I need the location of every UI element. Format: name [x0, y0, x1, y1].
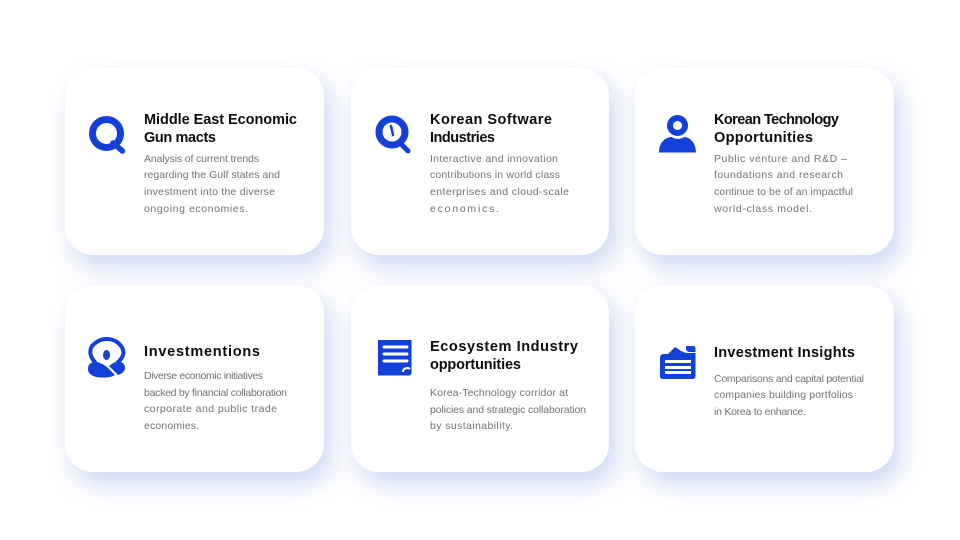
- text block: Comparisons and capital potential: [714, 373, 864, 385]
- heading: [430, 112, 552, 146]
- text block: foundations and research: [714, 169, 843, 181]
- heading: Industries: [430, 130, 495, 146]
- text block: in Korea to enhance.: [714, 406, 806, 418]
- text block: backed by financial collaboration: [144, 387, 287, 399]
- heading: [144, 112, 297, 146]
- text block: world-class model.: [713, 203, 812, 215]
- heading: Korean Software: [430, 112, 552, 128]
- panel: Investment Insights: [635, 285, 894, 472]
- text block: policies and strategic collaboration: [430, 404, 586, 416]
- text block: [430, 153, 569, 215]
- text block: contributions in world class: [430, 169, 560, 181]
- text block: enterprises and cloud-scale: [430, 186, 569, 198]
- text block: [714, 373, 864, 418]
- text block: continue to be of an impactful: [714, 186, 853, 198]
- text block: corporate and public trade: [144, 403, 277, 415]
- text block: Public venture and R&D –: [714, 153, 847, 165]
- text block: Interactive and innovation: [430, 153, 558, 165]
- text block: [713, 153, 853, 215]
- panel: Middle East Economic Contacts: [65, 68, 324, 255]
- text block: [430, 387, 586, 432]
- heading: [430, 339, 578, 373]
- heading: Opportunities: [714, 130, 813, 146]
- text block: [144, 370, 287, 432]
- heading: Investmentions: [144, 344, 260, 360]
- heading: opportunities: [430, 357, 521, 373]
- heading: [714, 112, 839, 146]
- text block: investment into the diverse: [144, 186, 275, 198]
- text block: economies.: [144, 420, 199, 432]
- heading: Middle East Economic: [144, 112, 297, 128]
- text block: ongoing economies.: [144, 203, 248, 215]
- heading: Investment Insights: [714, 345, 855, 361]
- icon: magnifier Q: [92, 120, 122, 151]
- text block: companies building portfolios: [714, 389, 853, 401]
- heading: Gun macts: [144, 130, 216, 146]
- panel: Investmentions: [65, 285, 324, 472]
- text block: economics.: [430, 203, 499, 215]
- icon: document: [378, 340, 412, 376]
- text block: Analysis of current trends: [144, 153, 259, 165]
- icon: cloud and figure: [88, 339, 125, 378]
- icon: folder: [660, 346, 696, 379]
- text block: [144, 153, 280, 215]
- icon: person: [659, 118, 696, 152]
- text block: Korea-Technology corridor at: [430, 387, 568, 399]
- text block: regarding the Gulf states and: [144, 169, 280, 181]
- panel: Ecosystem Industry opportunities: [351, 285, 609, 472]
- heading: Ecosystem Industry: [430, 339, 578, 355]
- panel: Korean Technology Opportunities: [635, 68, 894, 255]
- text block: Diverse economic initiatives: [144, 370, 263, 382]
- icon: magnifier with needle: [379, 119, 408, 151]
- heading: Korean Technology: [714, 112, 839, 128]
- panel: Korean Software Industries: [351, 68, 609, 255]
- text block: by sustainability.: [430, 420, 513, 432]
